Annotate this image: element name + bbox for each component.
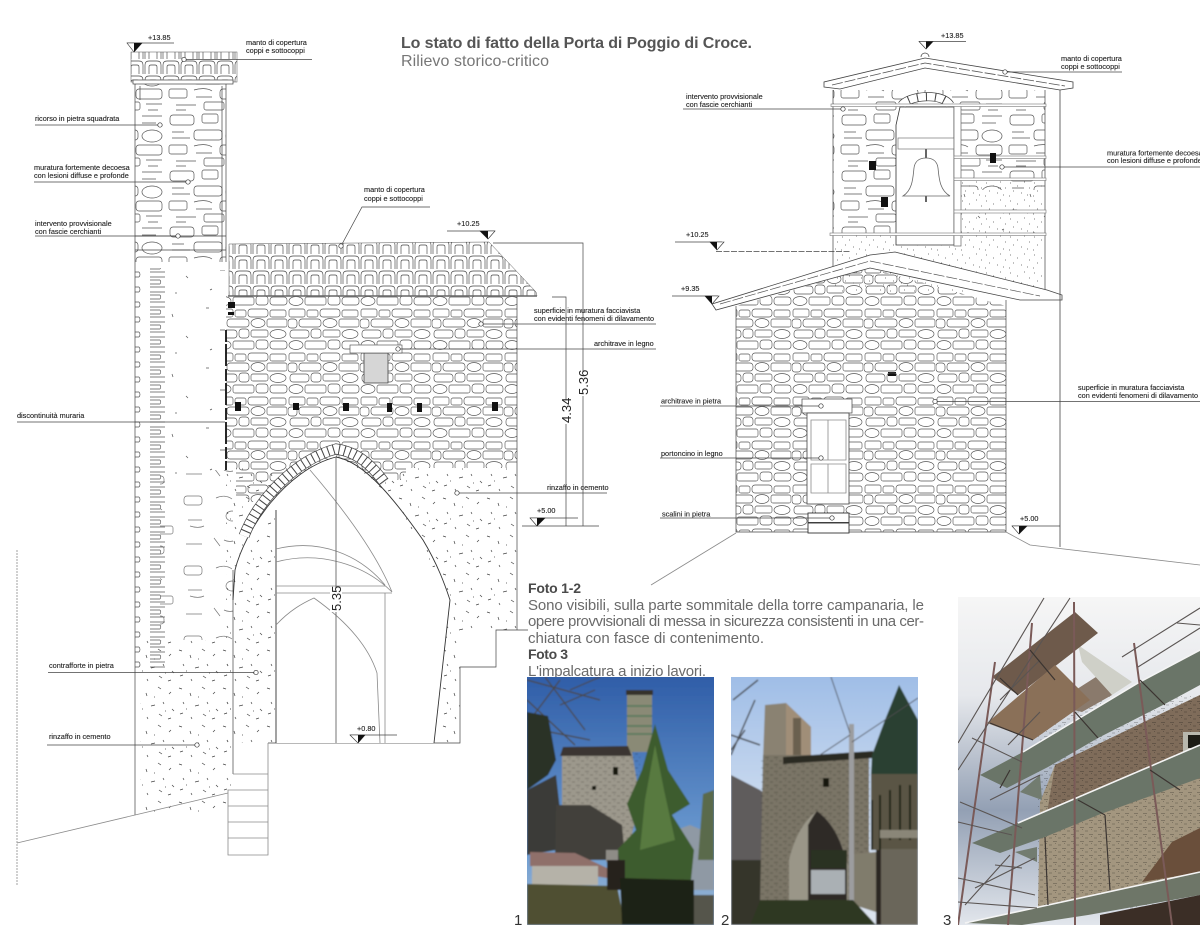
- ground and reference line: [651, 90, 1200, 585]
- masonry holes: [869, 153, 996, 376]
- level +13.85: [127, 33, 174, 52]
- photo captions text block: Foto 1-2: [528, 580, 581, 596]
- photo captions text block: Sono visibili, sulla parte sommitale della torre campanaria, le: [528, 597, 924, 614]
- callout: decohesive masonry: muratura fortemente decoesa: [1107, 148, 1200, 158]
- lower gable roof: [712, 252, 1062, 310]
- tower cap roof: [131, 52, 237, 84]
- voussoir stones: [244, 449, 384, 536]
- level +13.85: +13.85: [941, 31, 964, 40]
- putlog holes and masonry discontinuity: [226, 302, 498, 470]
- dimension 5.36: 5.36: [576, 370, 591, 395]
- timber platforms: [992, 612, 1098, 695]
- pointed arch: [233, 449, 450, 743]
- photo captions text block: opere provvisionali di messa in sicurezza consistenti in una cer-: [528, 613, 924, 630]
- callout: provisional hoops: intervento provvisionale: [35, 219, 112, 228]
- callout: gate roof covering: [339, 185, 430, 248]
- scaffold poles: [958, 602, 1172, 925]
- callout: gate roof covering: manto di copertura: [364, 185, 426, 194]
- bell opening: [896, 97, 961, 246]
- callout: roof covering: manto di copertura: [1061, 54, 1123, 63]
- callout: stone lintel: architrave in pietra: [661, 396, 722, 406]
- wall window: [350, 345, 402, 383]
- callout: provisional hoops: con fascie cerchianti: [35, 227, 101, 236]
- callout: facing masonry surface: [479, 306, 656, 326]
- callout: stone buttress: contrafforte in pietra: [49, 661, 115, 670]
- callout: facing masonry surface: [933, 383, 1200, 404]
- callout: wooden lintel: [396, 339, 656, 351]
- photo 2: front view of the gate: [725, 670, 925, 925]
- dimension 5.36: [493, 243, 591, 526]
- heading: Lo stato di fatto della Porta di Poggio di Croce.: [401, 35, 752, 52]
- callout: provisional hoops: [35, 219, 180, 238]
- level +5.00: +5.00: [1020, 514, 1038, 523]
- callout: wooden lintel: architrave in legno: [594, 339, 654, 348]
- left elevation drawing: gate and tower: [17, 33, 656, 885]
- level +10.25: +10.25: [686, 230, 709, 239]
- dimension 5.35: [329, 457, 344, 743]
- callout: stone steps: scalini in pietra: [662, 510, 711, 518]
- level +0.80: +0.80: [357, 724, 375, 733]
- callout: provisional hoops: intervento provvisionale: [686, 92, 763, 101]
- steel decks: [980, 650, 1200, 788]
- photo captions text block: L'impalcatura a inizio lavori.: [528, 663, 706, 680]
- hoop bands: [830, 104, 1046, 236]
- callout: stone buttress: [48, 661, 258, 675]
- lower wall masonry: [736, 268, 1006, 532]
- dimension 4.34: 4.34: [559, 398, 574, 423]
- callout: decohesive masonry: [34, 163, 190, 184]
- callout: squared stone course: ricorso in pietra squadrata: [35, 114, 120, 123]
- photo captions text block: [528, 580, 924, 680]
- level +0.80: [350, 724, 397, 743]
- scaffold braces: [958, 598, 1200, 908]
- callout: tower roof covering: [182, 38, 312, 62]
- callout: roof covering: coppi e sottocoppi: [1061, 62, 1120, 71]
- subheading: Rilievo storico-critico: [401, 53, 549, 70]
- callout: stone steps: [660, 510, 834, 520]
- stairs: [228, 743, 268, 855]
- level +10.25: [675, 230, 850, 252]
- level +13.85: [919, 31, 966, 49]
- callout: cement render left: rinzaffo in cemento: [49, 732, 111, 741]
- photo 1: tower from the slope with fir tree: [520, 670, 720, 925]
- photo 3: scaffolding on the tower: [958, 597, 1200, 925]
- level +9.35: +9.35: [681, 284, 699, 293]
- callout: facing masonry surface: con evidenti fenomeni di dilavamento: [1078, 391, 1198, 400]
- tower masonry: [135, 84, 233, 815]
- callout: wooden door: [660, 449, 823, 460]
- callout: decohesive masonry: con lesioni diffuse e profonde: [34, 171, 129, 180]
- callout: masonry discontinuity: discontinuità muraria: [17, 411, 85, 420]
- upper tower masonry: [833, 90, 1045, 293]
- callout: tower roof covering: coppi e sottocoppi: [246, 46, 305, 55]
- callout: facing masonry surface: con evidenti fenomeni di dilavamento: [534, 314, 654, 323]
- ground lines: [17, 550, 228, 885]
- callout: cement render left: [47, 732, 199, 747]
- callout: decohesive masonry: con lesioni diffuse e profonde: [1107, 156, 1200, 165]
- level +9.35: [672, 284, 719, 304]
- interior vault lines: [276, 470, 392, 743]
- level +5.00: [1012, 514, 1060, 534]
- right elevation drawing: bell tower: [651, 31, 1200, 585]
- callout: stone lintel: [660, 396, 823, 408]
- callout: tower roof covering: manto di copertura: [246, 38, 308, 47]
- callout: cement render right: [455, 483, 609, 495]
- callout: roof covering: [1003, 54, 1123, 74]
- gate tiled roof: [228, 242, 537, 296]
- dimension 5.35: 5.35: [329, 586, 344, 611]
- callout: provisional hoops: con fascie cerchianti: [686, 100, 752, 109]
- level +10.25: [447, 219, 495, 239]
- gate masonry wall: [226, 296, 528, 774]
- icon: bell: [903, 149, 950, 202]
- callout: facing masonry surface: superficie in muratura facciavista: [1078, 383, 1185, 392]
- level +5.00: +5.00: [537, 506, 555, 515]
- wooden door: [802, 399, 852, 504]
- callout: decohesive masonry: muratura fortemente decoesa: [34, 163, 131, 172]
- dimension 4.34: [522, 297, 599, 526]
- callout: wooden door: portoncino in legno: [661, 449, 723, 458]
- level +10.25: +10.25: [457, 219, 480, 228]
- callout: gate roof covering: coppi e sottocoppi: [364, 194, 423, 203]
- title block: [401, 35, 752, 70]
- callout: facing masonry surface: superficie in muratura facciavista: [534, 306, 641, 315]
- upper gable roof: [824, 53, 1073, 90]
- photo captions text block: Foto 3: [528, 646, 568, 662]
- photo captions text block: chiatura con fasce di contenimento.: [528, 630, 764, 647]
- callout: decohesive masonry: [1000, 148, 1200, 169]
- photo numbers: [514, 912, 951, 925]
- level +13.85: +13.85: [148, 33, 171, 42]
- level +5.00: [530, 506, 578, 526]
- callout: squared stone course: [35, 114, 162, 127]
- stone steps: [808, 513, 849, 533]
- callout: cement render right: rinzaffo in cemento: [547, 483, 609, 492]
- callout: provisional hoops: [683, 92, 845, 111]
- building stone: [1038, 695, 1200, 908]
